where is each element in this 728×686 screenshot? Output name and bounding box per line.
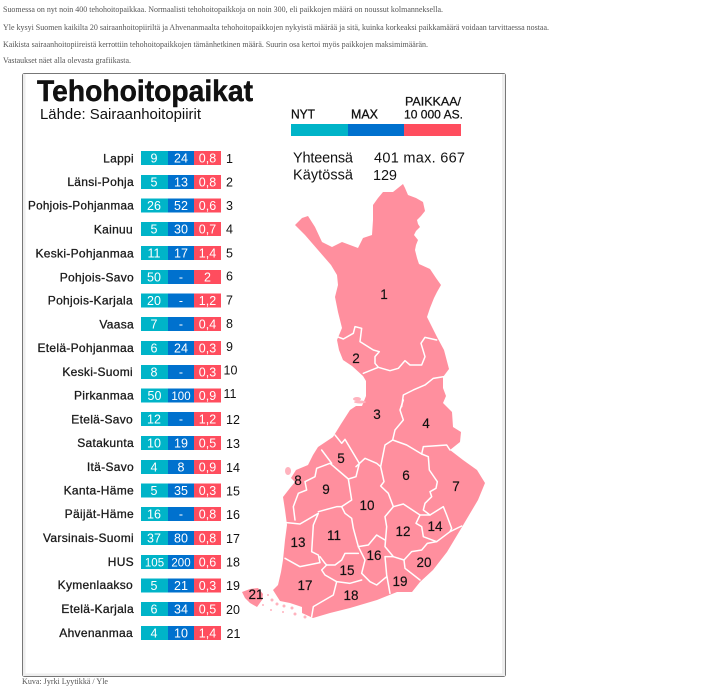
row: Päijät-Häme: Päijät-Häme	[65, 507, 134, 521]
region borders	[285, 327, 462, 617]
row: Kainuu	[94, 222, 233, 236]
row: HUS: 200	[171, 558, 191, 570]
map region numbers: 12	[395, 524, 411, 539]
row: Kymenlaakso: 19	[226, 579, 240, 593]
row: Lappi: 1	[226, 152, 233, 166]
row: Pohjois-Savo: 50	[147, 270, 161, 284]
row: Varsinais-Suomi: 37	[147, 532, 161, 546]
row: Pohjois-Karjala: 20	[147, 294, 161, 308]
map region numbers: 18	[343, 588, 359, 603]
row: Itä-Savo: Itä-Savo	[87, 460, 134, 474]
row: Pohjois-Savo: -	[179, 270, 183, 284]
row: Pohjois-Savo: 2	[204, 270, 211, 284]
row: Pohjois-Karjala: 7	[226, 294, 233, 308]
row: HUS: HUS	[108, 555, 134, 569]
row: Vaasa: 0,4	[199, 318, 216, 332]
row: Etelä-Pohjanmaa: 24	[174, 342, 188, 356]
row: Kanta-Häme	[64, 484, 240, 498]
row: Keski-Suomi: -	[179, 366, 183, 380]
row: Etelä-Pohjanmaa: 6	[151, 342, 158, 356]
row: Keski-Pohjanmaa: Keski-Pohjanmaa	[35, 246, 134, 260]
row: Keski-Pohjanmaa: 11	[148, 246, 161, 260]
row: Etelä-Pohjanmaa: 9	[226, 340, 233, 354]
map region numbers: 1	[380, 287, 388, 302]
row: Kanta-Häme: 5	[151, 484, 158, 498]
row: Pirkanmaa: 0,9	[199, 389, 216, 403]
row: HUS: 105	[145, 558, 164, 570]
legend: 10 000 AS.	[404, 108, 463, 122]
intro text	[3, 4, 549, 65]
row: Pirkanmaa: 50	[148, 389, 161, 403]
row: Kymenlaakso: 21	[174, 579, 188, 593]
row: Etelä-Pohjanmaa	[37, 340, 233, 356]
row: Etelä-Savo: -	[179, 412, 183, 426]
map region numbers: 19	[392, 574, 408, 589]
row: Satakunta: 19	[174, 436, 188, 450]
row: Pohjois-Pohjanmaa: 26	[147, 199, 161, 213]
row: Länsi-Pohja: 5	[151, 175, 158, 189]
row: Etelä-Karjala: 6	[151, 602, 158, 616]
title: Tehohoitopaikat	[37, 75, 253, 108]
row: Itä-Savo: 14	[226, 461, 240, 475]
row: Pohjois-Karjala: 1,2	[199, 294, 216, 308]
row: Itä-Savo: 4	[151, 460, 158, 474]
row: Kymenlaakso	[58, 578, 240, 593]
panel: infographic frame	[22, 74, 506, 676]
row: Satakunta: 10	[147, 436, 161, 450]
row: Kymenlaakso: Kymenlaakso	[58, 578, 133, 592]
map region numbers: 4	[422, 416, 430, 431]
map region numbers: 2	[352, 351, 360, 366]
row: Pirkanmaa	[74, 387, 237, 403]
map region numbers: 6	[402, 468, 410, 483]
row: Varsinais-Suomi: 80	[174, 532, 188, 546]
row: Päijät-Häme: 16	[226, 508, 240, 522]
map region numbers: 20	[416, 555, 432, 570]
row: Varsinais-Suomi: 17	[226, 532, 240, 546]
row: Kanta-Häme: Kanta-Häme	[64, 484, 134, 498]
row: Etelä-Karjala: 34	[174, 602, 188, 616]
map region numbers: 14	[427, 519, 443, 534]
row: Pohjois-Pohjanmaa: 0,6	[199, 199, 216, 213]
map region numbers: 15	[339, 563, 355, 578]
legend: PAIKKAA/	[405, 95, 462, 109]
totals: Yhteensä	[293, 150, 354, 166]
intro text: Vastaukset näet alla olevasta grafiikasta.	[3, 55, 131, 65]
row: Etelä-Savo	[71, 412, 240, 427]
row: Päijät-Häme: -	[179, 508, 183, 522]
row: Etelä-Karjala: 20	[226, 603, 240, 617]
row: Keski-Suomi: 10	[224, 364, 237, 378]
row: Pohjois-Savo	[60, 270, 233, 284]
row: Vaasa: -	[179, 318, 183, 332]
row: Lappi	[103, 151, 233, 166]
row: Satakunta: 13	[226, 437, 240, 451]
legend: NYT	[291, 108, 315, 122]
row: Pohjois-Pohjanmaa: 52	[174, 199, 188, 213]
row: Varsinais-Suomi: Varsinais-Suomi	[43, 531, 134, 545]
row: Satakunta: 0,5	[199, 436, 216, 450]
row: Keski-Suomi: 0,3	[199, 366, 216, 380]
row: Satakunta: Satakunta	[77, 436, 134, 450]
row: Ahvenanmaa: 1,4	[199, 626, 216, 640]
row: Etelä-Savo: 12	[147, 412, 161, 426]
row: HUS	[108, 555, 240, 570]
map region numbers: 9	[322, 482, 330, 497]
photo credit: Kuva: Jyrki Lyytikkä / Yle	[22, 676, 108, 686]
map region numbers: 16	[366, 548, 382, 563]
row: Itä-Savo	[87, 460, 240, 475]
map region numbers: 7	[452, 479, 460, 494]
map region numbers: 17	[297, 578, 313, 593]
map region numbers: 5	[337, 451, 345, 466]
row: Keski-Pohjanmaa: 5	[226, 246, 233, 260]
totals: Käytössä	[293, 168, 354, 184]
table: hospital districts	[28, 151, 240, 641]
intro text: Suomessa on nyt noin 400 tehohoitopaikkaa. Normaalisti tehohoitopaikkoja on noin 300, eli paikkojen määrä on noussut kolmanneksella.	[3, 4, 443, 14]
row: Vaasa: Vaasa	[99, 318, 134, 332]
map region numbers: 8	[294, 473, 302, 488]
row: Kainuu: 5	[151, 222, 158, 236]
row: Pohjois-Pohjanmaa	[28, 198, 233, 213]
legend: MAX	[351, 108, 379, 122]
row: Vaasa: 7	[151, 318, 158, 332]
row: Pohjois-Karjala: -	[179, 294, 183, 308]
row: Lappi: 24	[174, 152, 188, 166]
row: Päijät-Häme: 16	[147, 508, 161, 522]
row: Päijät-Häme	[65, 507, 240, 522]
mainland shape	[273, 184, 485, 618]
row: Ahvenanmaa: 4	[151, 626, 158, 640]
Aland islands	[242, 588, 263, 607]
row: Etelä-Karjala: Etelä-Karjala	[61, 602, 134, 616]
row: Etelä-Savo: 1,2	[199, 412, 216, 426]
row: Ahvenanmaa	[59, 626, 240, 641]
totals	[293, 150, 465, 184]
map region numbers	[248, 287, 460, 603]
row: Pirkanmaa: Pirkanmaa	[74, 388, 134, 402]
row: Länsi-Pohja: 0,8	[199, 175, 216, 189]
row: Ahvenanmaa: Ahvenanmaa	[59, 626, 133, 640]
legend	[291, 95, 463, 136]
row: Keski-Pohjanmaa: 1,4	[199, 246, 216, 260]
row: Vaasa	[99, 317, 233, 332]
row: Ahvenanmaa: 21	[226, 627, 240, 641]
row: Etelä-Savo: Etelä-Savo	[71, 412, 133, 426]
row: Pohjois-Karjala	[48, 294, 233, 308]
map of Finland	[242, 184, 485, 618]
row: Kainuu: Kainuu	[94, 222, 133, 236]
row: Länsi-Pohja: 13	[174, 175, 188, 189]
row: Kanta-Häme: 0,3	[199, 484, 216, 498]
row: Pohjois-Pohjanmaa: Pohjois-Pohjanmaa	[28, 198, 134, 212]
row: Lappi: 0,8	[199, 152, 216, 166]
row: Keski-Suomi	[62, 364, 237, 380]
row: Ahvenanmaa: 10	[174, 626, 188, 640]
row: Kainuu: 0,7	[199, 222, 216, 236]
row: Itä-Savo: 0,9	[199, 460, 216, 474]
row: Vaasa: 8	[226, 317, 233, 331]
row: Keski-Suomi: 8	[151, 366, 158, 380]
row: Keski-Pohjanmaa: 17	[174, 246, 188, 260]
row: Satakunta	[77, 436, 240, 451]
intro text: Kaikista sairaanhoitopiireistä kerrottiin tehohoitopaikkojen tämänhetkinen määrä. Suurin osa kertoi myös paikkojen maksimimäärän.	[3, 39, 428, 49]
row: Pohjois-Karjala: Pohjois-Karjala	[48, 294, 133, 308]
map region numbers: 21	[248, 587, 264, 602]
map region numbers: 11	[327, 528, 341, 543]
row: Länsi-Pohja: 2	[226, 176, 233, 190]
row: HUS: 18	[226, 556, 240, 570]
row: Etelä-Pohjanmaa: 0,3	[199, 342, 216, 356]
row: Etelä-Karjala: 0,5	[199, 602, 216, 616]
row: Itä-Savo: 8	[178, 460, 185, 474]
row: Keski-Suomi: Keski-Suomi	[62, 365, 133, 379]
row: Varsinais-Suomi	[43, 531, 240, 546]
map region numbers: 3	[373, 407, 381, 422]
row: Lappi: 9	[151, 152, 158, 166]
small islands	[262, 397, 366, 618]
row: Pirkanmaa: 100	[171, 391, 191, 403]
row: Pohjois-Savo: 6	[226, 270, 233, 284]
intro text: Yle kysyi Suomen kaikilta 20 sairaanhoitopiiriltä ja Ahvenanmaalta tehohoitopaikkojen nykyistä määrää ja sitä, kuinka korkeaksi paikkamäärä voidaan tarvittaessa nostaa.	[3, 22, 549, 32]
row: Päijät-Häme: 0,8	[199, 508, 216, 522]
totals: 129	[373, 168, 397, 184]
row: Keski-Pohjanmaa	[35, 246, 233, 260]
row: Kymenlaakso: 5	[151, 579, 158, 593]
row: Lappi: Lappi	[103, 152, 134, 166]
row: Varsinais-Suomi: 0,8	[199, 532, 216, 546]
row: Etelä-Pohjanmaa: Etelä-Pohjanmaa	[37, 341, 134, 355]
row: Kanta-Häme: 35	[174, 484, 188, 498]
row: Kainuu: 4	[226, 222, 233, 236]
row: Länsi-Pohja	[67, 175, 233, 190]
row: Kainuu: 30	[174, 222, 188, 236]
map region numbers: 13	[290, 535, 306, 550]
row: HUS: 0,6	[199, 556, 216, 570]
row: Pohjois-Pohjanmaa: 3	[226, 199, 233, 213]
row: Pohjois-Savo: Pohjois-Savo	[60, 270, 134, 284]
subtitle: source: Lähde: Sairaanhoitopiirit	[40, 107, 201, 123]
map region numbers: 10	[359, 498, 375, 513]
row: Pirkanmaa: 11	[224, 387, 237, 401]
row: Kanta-Häme: 15	[226, 484, 240, 498]
totals: 401 max. 667	[374, 150, 465, 166]
row: Etelä-Savo: 12	[226, 413, 240, 427]
row: Kymenlaakso: 0,3	[199, 579, 216, 593]
row: Etelä-Karjala	[61, 602, 240, 617]
row: Länsi-Pohja: Länsi-Pohja	[67, 175, 134, 189]
